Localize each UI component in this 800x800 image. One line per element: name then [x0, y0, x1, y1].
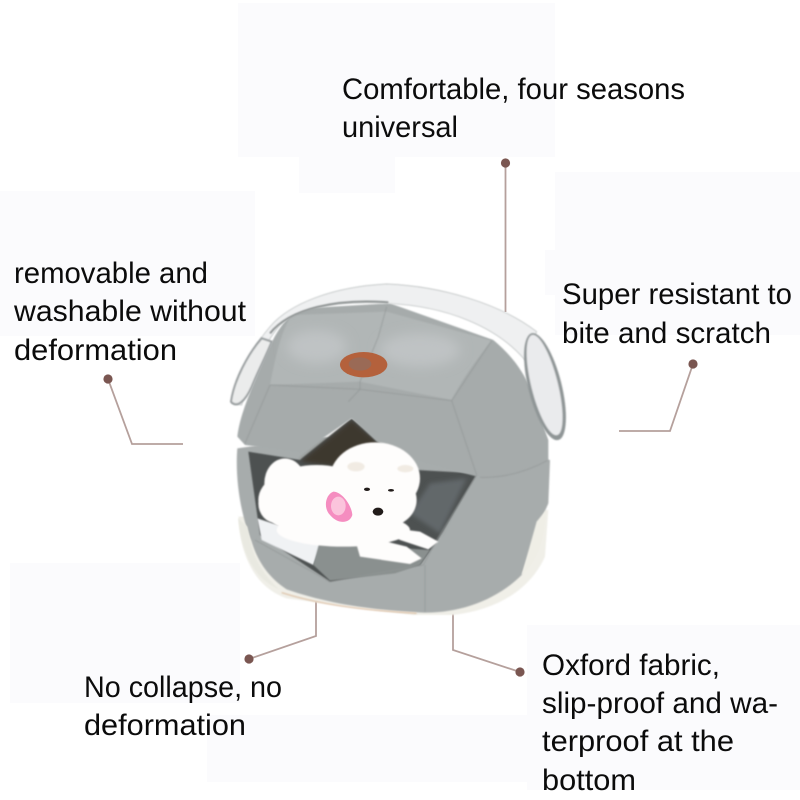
text: oxford fabric	[542, 649, 778, 797]
callout line: comfort	[501, 158, 510, 312]
gray cushion	[313, 540, 430, 581]
white side patch right	[522, 510, 546, 575]
text: oxford fabric: terproof at the	[542, 725, 734, 758]
text: comfortable	[342, 73, 685, 144]
text: super resistant	[562, 278, 792, 350]
upper crown lighter	[270, 312, 492, 400]
callout line: resistant	[619, 359, 698, 431]
dog ears shade	[347, 462, 413, 472]
text: oxford fabric: slip-proof and wa-	[542, 687, 778, 720]
text: removable and washable: washable without	[13, 295, 247, 328]
text: no collapse	[84, 671, 282, 742]
text: oxford fabric: bottom	[542, 764, 636, 797]
text: removable and washable: deformation	[14, 334, 177, 367]
top visor shell	[237, 303, 548, 477]
dog	[258, 442, 438, 564]
inner cushion	[410, 478, 467, 533]
callout line: removable	[103, 374, 183, 444]
text: super resistant: bite and scratch	[562, 317, 771, 350]
text: removable and washable	[13, 257, 247, 367]
text: no collapse: No collapse, no	[84, 671, 282, 704]
text: removable and washable: removable and	[14, 257, 208, 290]
text: comfortable: universal	[342, 111, 458, 144]
text: super resistant: Super resistant to	[562, 278, 792, 311]
dog face	[364, 488, 394, 516]
leather badge	[340, 352, 387, 377]
soft mottling	[287, 330, 460, 367]
right ear cup	[516, 329, 574, 444]
callout line: oxford fabric	[453, 612, 525, 677]
bottom tan edge	[282, 593, 417, 613]
pink toy	[326, 492, 352, 522]
text: oxford fabric: Oxford fabric,	[542, 649, 720, 682]
cream base sides	[238, 510, 548, 615]
callout line: no collapse	[244, 601, 316, 664]
strap inner shadow	[270, 301, 388, 333]
lower shell	[237, 437, 550, 613]
illustration: pet bed with dog	[231, 284, 574, 615]
left ear cup	[231, 338, 272, 404]
white side patch left	[238, 518, 280, 590]
text: no collapse: deformation	[84, 709, 246, 742]
mouth dark interior	[248, 418, 477, 582]
text: comfortable: Comfortable, four seasons	[342, 73, 685, 106]
white cushion	[257, 518, 323, 565]
inner back dark brown	[300, 420, 387, 470]
white strap	[232, 284, 537, 405]
seams	[245, 307, 548, 612]
